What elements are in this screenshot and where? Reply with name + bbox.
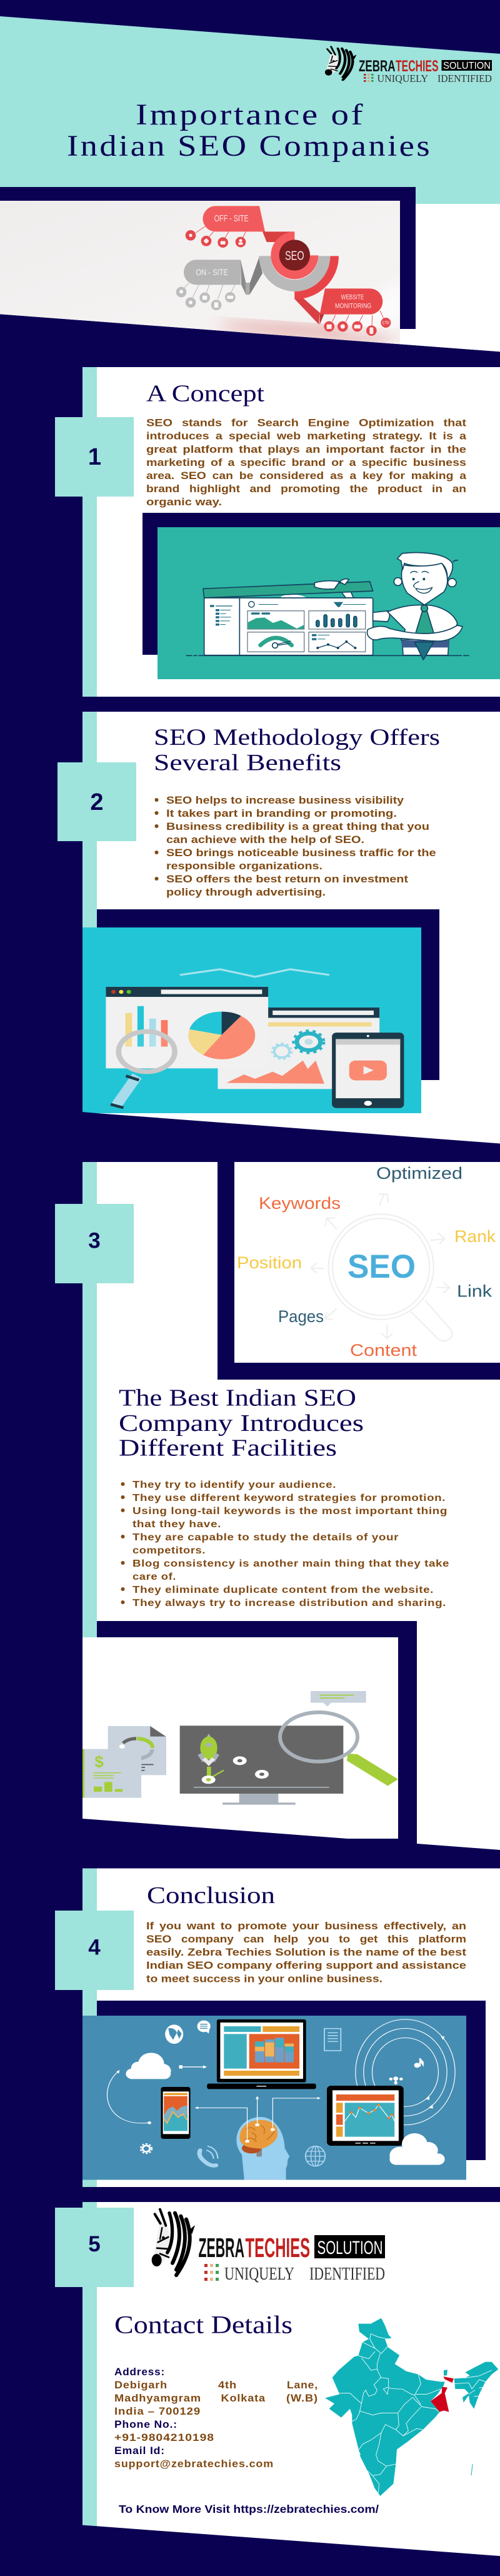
SEO concentric ring: SEO [285, 248, 304, 263]
off-site tag: OFF - SITE [214, 214, 249, 224]
tablet [327, 2086, 404, 2146]
contact text block: Lane, [287, 2380, 318, 2391]
bullet list: facilities: Using long-tail keywords is the most important thing [132, 1506, 448, 1517]
bullet list: facilities: They eliminate duplicate content from the website. [132, 1585, 434, 1595]
illustration: analytics windows and tablet [82, 927, 421, 1113]
paragraph: concept: organic way. [146, 496, 222, 508]
contact text block: +91-9804210198 [114, 2432, 214, 2443]
paragraph: concept: marketing of a specific brand or a specific business [146, 457, 466, 468]
off-site tag [203, 206, 294, 242]
illustration: SEO keyword wheel: Optimized [376, 1164, 462, 1183]
illustration: monitor, rocket, magnifier and reports: $ [94, 1752, 104, 1771]
illustration: SEO keyword wheel: Rank [454, 1227, 496, 1246]
logo: Zebra Techies large: TECHIES [245, 2233, 310, 2263]
map of India with West Bengal highlighted [325, 2318, 498, 2496]
on-site tag: ON - SITE [196, 267, 228, 277]
section 3: best Indian SEO company [55, 1162, 500, 1850]
bullet list: facilities: care of. [132, 1572, 176, 1582]
number box 4: 4 [88, 1935, 101, 1960]
bullet list: facilities: They try to identify your audience. [132, 1480, 336, 1490]
heading: The Best Indian SEO [119, 1385, 364, 1462]
paragraph: concept: area. SEO can be considered as a key for making a [146, 470, 467, 482]
section 4: conclusion [55, 1869, 500, 2187]
heading: Conclusion: Conclusion [147, 1882, 275, 1909]
bullet list: benefits: policy through advertising. [166, 886, 326, 898]
brain connector arrows [195, 2096, 321, 2143]
section 5: contact details [55, 2202, 500, 2556]
paragraph: conclusion [146, 1920, 466, 1985]
white area right of hero image [400, 204, 500, 351]
number box 5: 5 [88, 2232, 101, 2256]
logo: Zebra Techies top: UNIQUELY [378, 73, 428, 84]
illustration: SEO keyword wheel: Content [350, 1341, 418, 1360]
logo: Zebra Techies large: ZEBRA [199, 2233, 244, 2263]
logo: Zebra Techies large: IDENTIFIED [309, 2264, 385, 2284]
paragraph: concept: great platform that plays an important factor in the [146, 443, 466, 455]
bullet list: facilities [121, 1480, 449, 1609]
image frame [218, 1162, 500, 1380]
title [67, 98, 432, 163]
bullet list: benefits: Business credibility is a great thing that you [166, 821, 429, 832]
heading: SEO Methodology [154, 725, 440, 775]
paragraph: concept: SEO stands for Search Engine Optimization that [146, 417, 466, 429]
bullet list: benefits: SEO helps to increase business visibility [166, 794, 404, 806]
section 1: a concept [55, 367, 500, 697]
number box 2 [58, 762, 136, 841]
connector lines [196, 226, 383, 326]
heading: Contact Details: Contact Details [114, 2310, 292, 2339]
logo: Zebra Techies top: SOLUTION [443, 61, 491, 71]
paragraph: concept: introduces a special web marketing strategy. It is a [146, 430, 467, 442]
number box 5 [55, 2208, 134, 2287]
bullet list: facilities: Blog consistency is another main thing that they take [132, 1558, 449, 1569]
logo: Zebra Techies top: ZEBRA [359, 58, 395, 75]
contact text block: Kolkata [221, 2393, 266, 2404]
paragraph: conclusion: Indian SEO company offering support and assistance [146, 1959, 466, 1971]
website call to action: To Know More Visit https://zebratechies.com/ [119, 2503, 379, 2515]
heading: A Concept: A Concept [146, 380, 265, 407]
contact text block [114, 2366, 318, 2470]
bullet list: benefits [155, 794, 436, 898]
contact text block: support@zebratechies.com [114, 2458, 274, 2470]
logo: Zebra Techies top: IDENTIFIED [438, 73, 492, 84]
phone [161, 2087, 191, 2139]
head and brain [236, 2117, 289, 2179]
illustration: SEO keyword wheel: Keywords [259, 1194, 341, 1213]
contact text block: Address: [114, 2366, 165, 2378]
hero image: SEO off-site, on-site, monitoring diagram [0, 201, 406, 346]
number box 2: 2 [90, 789, 104, 816]
illustration: SEO keyword wheel [234, 1162, 500, 1363]
laptop [217, 2019, 306, 2083]
paragraph: conclusion: easily. Zebra Techies Solution is the name of the best [146, 1946, 466, 1958]
illustration: SEO keyword wheel: Position [237, 1253, 302, 1272]
number box 3: 3 [88, 1228, 101, 1253]
contact text block: 4th [218, 2380, 237, 2391]
heading: The Best Indian SEO: The Best Indian SEO [119, 1385, 356, 1411]
contact text block: Email Id: [114, 2445, 165, 2457]
hero image frame [0, 187, 416, 329]
bullet list: benefits: responsible organizations. [166, 860, 322, 872]
bullet list: benefits: SEO brings noticeable business traffic for the [166, 847, 436, 859]
slanted navy divider below hero [0, 314, 500, 373]
paragraph: conclusion: SEO company can help you to get this platform [146, 1933, 466, 1945]
illustration: SEO keyword wheel: SEO [348, 1248, 416, 1285]
cloud left and arrow [126, 2053, 207, 2079]
paragraph: concept: brand highlight and promoting the product in an [146, 483, 466, 495]
heading: The Best Indian SEO: Different Facilities [119, 1435, 337, 1462]
bullet list: facilities: competitors. [132, 1545, 206, 1556]
website monitoring tag [294, 288, 382, 325]
website monitoring tag: MONITORING [335, 303, 371, 310]
contact text block: Madhyamgram [114, 2393, 201, 2404]
section 2: methodology benefits [58, 712, 500, 1143]
number box 1 [55, 417, 134, 497]
bullet list: benefits: It takes part in branding or promoting. [166, 807, 397, 819]
contact text block: Phone No.: [114, 2419, 178, 2430]
logo: Zebra Techies large: SOLUTION [318, 2238, 382, 2258]
on-site tag [184, 258, 262, 295]
logo: Zebra Techies large: UNIQUELY [224, 2264, 294, 2284]
number box 4 [55, 1911, 134, 1990]
illustration: man presenting dashboard [158, 527, 500, 679]
rings [356, 2019, 455, 2125]
paragraph: conclusion: If you want to promote your business effectively, an [146, 1920, 466, 1932]
SEO concentric ring [259, 231, 339, 300]
number box 3 [55, 1204, 134, 1283]
paragraph: concept [146, 417, 467, 508]
contact text block: (W.B) [286, 2393, 318, 2404]
bullet list: facilities: They use different keyword strategies for promotion. [132, 1493, 446, 1503]
hero image: SEO off-site, on-site, monitoring diagram: CTR [382, 320, 389, 326]
bullet list: benefits: SEO offers the best return on investment [166, 873, 408, 885]
logo: Zebra Techies top [325, 46, 492, 84]
phone and globe icons [199, 2150, 216, 2166]
illustration: SEO keyword wheel: Pages [278, 1307, 324, 1326]
image frame [97, 2001, 486, 2160]
logo: Zebra Techies top: TECHIES [396, 58, 439, 75]
globes and bubbles [165, 2024, 183, 2044]
cloud right [389, 2133, 445, 2165]
image frame [97, 909, 439, 1080]
title: Indian SEO Companies [67, 129, 432, 163]
bullet list: facilities: that they have. [132, 1519, 221, 1530]
heading: The Best Indian SEO: Company Introduces [119, 1410, 364, 1437]
logo: Zebra Techies large [152, 2210, 385, 2284]
paragraph: conclusion: to meet success in your online business. [146, 1973, 382, 1985]
icons row [186, 230, 391, 336]
website monitoring tag: WEBSITE [341, 294, 364, 301]
illustration: connected devices and brain [82, 2016, 466, 2180]
title: Importance of [136, 98, 365, 131]
bullet list: facilities: They always try to increase distribution and sharing. [132, 1598, 446, 1609]
heading: SEO Methodology: Several Benefits [154, 750, 341, 775]
illustration: monitor, rocket, magnifier and reports [82, 1637, 398, 1839]
illustration: SEO keyword wheel: Link [457, 1282, 492, 1301]
contact text block: Debigarh [114, 2380, 168, 2391]
heading: SEO Methodology: SEO Methodology Offers [154, 725, 440, 750]
contact text block: India – 700129 [114, 2406, 201, 2417]
image frame [142, 513, 500, 655]
bullet list: facilities: They are capable to study the details of your [132, 1532, 399, 1543]
number box 1: 1 [88, 444, 101, 470]
header band with logo and title [0, 16, 500, 204]
bullet list: benefits: can achieve with the help of SEO. [166, 834, 364, 846]
